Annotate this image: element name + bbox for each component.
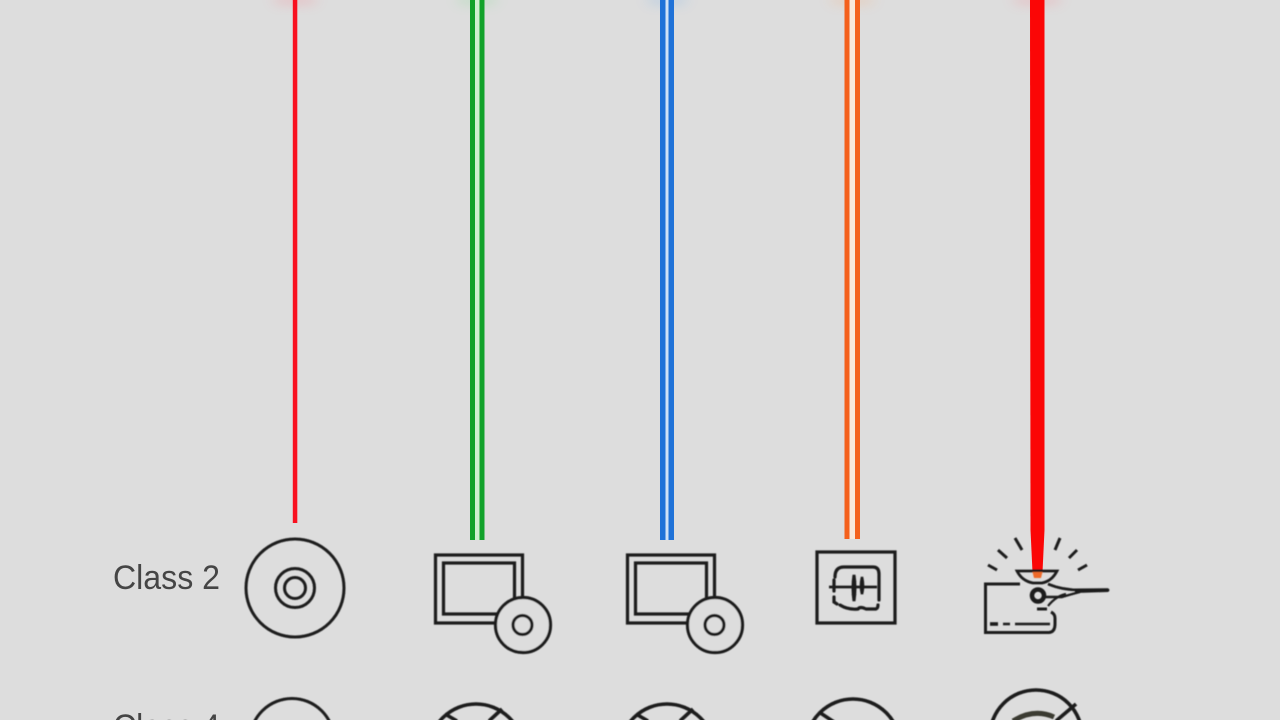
icon: orange column framed target: [817, 552, 895, 623]
laser beam: blue double line: [645, 0, 689, 540]
icon: class 4 blue prohibition sign: [628, 701, 706, 720]
laser beam: orange double line: [828, 0, 876, 539]
laser beam: green double line: [455, 0, 499, 540]
icon: green column screen with disc: [436, 555, 550, 652]
sparks: [988, 538, 1087, 570]
icon: class 4 green prohibition sign: [438, 701, 514, 720]
icon: class 4 disc: [252, 696, 332, 720]
icon: class 2 disc: [246, 539, 344, 637]
laser beam: class 2 red: [271, 0, 319, 523]
laser beam: thick red: [1011, 0, 1063, 572]
icon: class 4 orange prohibition sign: [811, 696, 895, 720]
row label: Class 2: Class 2: [113, 559, 220, 597]
icon: class 4 style burn with sparks: [986, 538, 1110, 632]
icon: class 4 red prohibition sign: [990, 688, 1082, 720]
icon: blue column screen with disc: [628, 555, 742, 652]
